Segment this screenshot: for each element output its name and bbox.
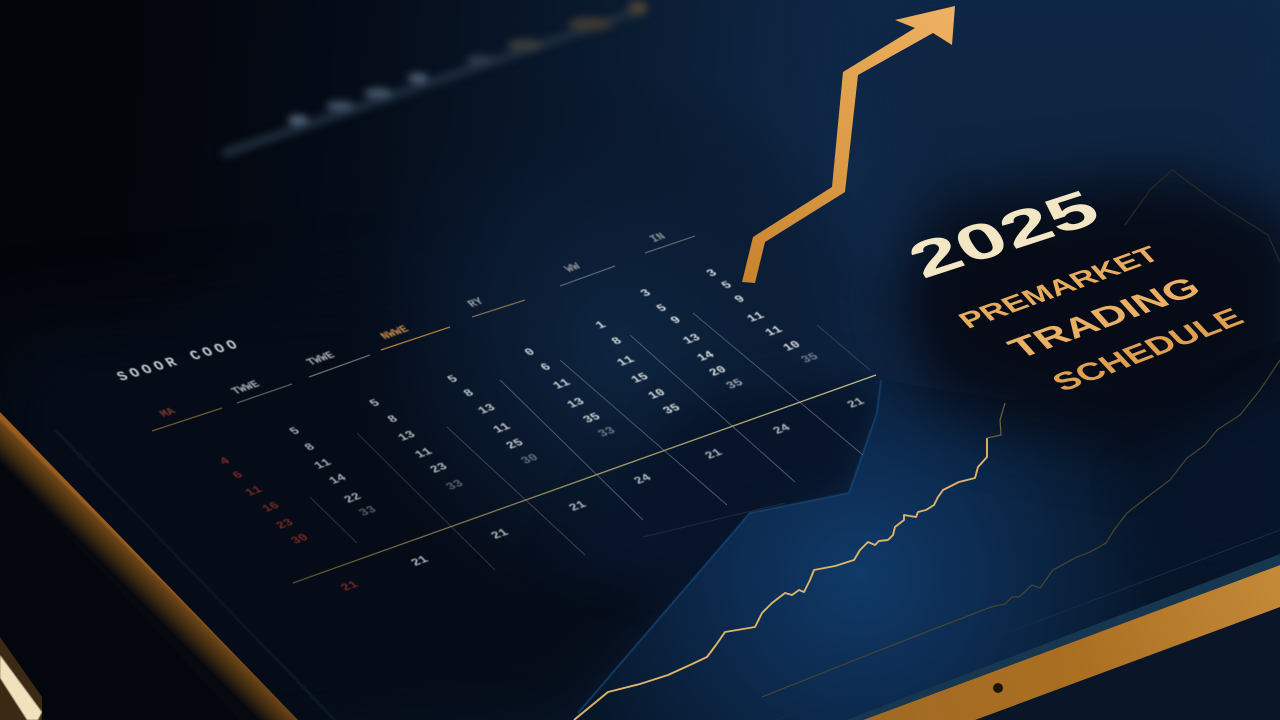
gold edge: left	[0, 412, 298, 720]
calendar column 3: 23	[427, 461, 451, 476]
calendar column 7: 20	[706, 364, 730, 379]
calendar column 8: 5	[719, 279, 735, 291]
calendar column: red dates: 6	[230, 469, 246, 481]
calendar weekday labels: MA	[157, 406, 179, 420]
calendar column 2: 33	[356, 504, 380, 519]
calendar column 4: 11	[490, 421, 514, 436]
calendar bottom row: 21	[408, 554, 432, 569]
calendar column 6: 15	[628, 371, 652, 386]
SCHEDULE: SCHEDULE	[1045, 303, 1250, 397]
dim upper contour line	[1125, 170, 1280, 262]
device button	[993, 683, 1003, 693]
calendar column 6: 35	[660, 402, 684, 417]
gold edge: right	[776, 530, 1280, 720]
calendar column 8: 10	[780, 339, 804, 354]
PREMARKET: PREMARKET	[953, 242, 1166, 334]
calendar weekday labels: IN	[647, 231, 669, 245]
calendar column 5: 6	[538, 361, 554, 373]
rising arrow	[742, 6, 955, 283]
calendar column: red dates: 30	[288, 532, 312, 547]
calendar column 7	[638, 287, 747, 392]
calendar gold axis line	[293, 375, 876, 583]
calendar column 3	[367, 397, 467, 493]
calendar column 4: 25	[503, 437, 527, 452]
calendar column 8: 11	[762, 324, 786, 339]
calendar column 7: 14	[694, 349, 718, 364]
calendar weekday labels: WW	[562, 261, 584, 275]
calendar column 4: 30	[518, 452, 542, 467]
calendar weekday labels	[157, 231, 669, 420]
calendar bottom row: 24	[631, 472, 655, 487]
gold chart line faint top	[987, 403, 1005, 438]
calendar right shade	[560, 375, 880, 590]
calendar column 2: 14	[326, 472, 350, 487]
calendar column: red dates	[217, 455, 312, 547]
calendar column 8: 9	[732, 293, 748, 305]
calendar column 5: 33	[595, 425, 619, 440]
calendar column 7: 35	[723, 377, 747, 392]
right side navy surface	[860, 0, 1280, 260]
calendar column 6	[593, 319, 684, 417]
calendar column 3: 8	[385, 413, 401, 425]
calendar column 4: 13	[475, 402, 499, 417]
calendar column 5	[522, 346, 619, 440]
blue chart outline	[578, 380, 881, 713]
calendar bottom row: 21	[844, 396, 868, 411]
calendar column 6: 8	[609, 335, 625, 347]
calendar column 5: 35	[580, 411, 604, 426]
calendar column 6: 10	[645, 387, 669, 402]
calendar weekday labels: TWWE	[304, 350, 338, 368]
calendar column 2: 5	[287, 425, 303, 437]
calendar column 8: 11	[744, 310, 768, 325]
calendar bottom row: 24	[770, 422, 794, 437]
calendar column 7: 5	[654, 302, 670, 314]
calendar column: red dates: 16	[259, 500, 283, 515]
calendar column 7: 9	[668, 314, 684, 326]
calendar column 7: 13	[680, 332, 704, 347]
year: 2025	[898, 180, 1110, 289]
calendar column: red dates: 11	[242, 484, 266, 499]
dark title patch	[890, 175, 1280, 450]
lower calendar shade	[0, 290, 850, 720]
dark right fade	[1130, 380, 1280, 590]
calendar bottom row: 21	[338, 579, 362, 594]
calendar column 2: 8	[302, 441, 318, 453]
calendar bottom row	[338, 396, 868, 594]
blue chart area	[574, 340, 1280, 720]
calendar column 8	[704, 267, 822, 366]
calendar column 4: 8	[461, 387, 477, 399]
calendar column 3: 11	[412, 446, 436, 461]
streak of blurred text at far edge	[220, 1, 648, 158]
calendar column 4	[445, 373, 542, 467]
calendar column 3: 13	[395, 429, 419, 444]
calendar column 2: 11	[311, 457, 335, 472]
calendar column 8: 35	[798, 351, 822, 366]
calendar bottom row: 21	[702, 447, 726, 462]
calendar grid lines	[310, 313, 870, 570]
calendar column: red dates: 4	[217, 455, 234, 468]
calendar column 6: 11	[614, 354, 638, 369]
pen at bottom left	[0, 637, 42, 720]
calendar column 5: 13	[564, 396, 588, 411]
calendar weekday labels: TWWE	[229, 379, 263, 397]
calendar bottom row: 21	[488, 527, 512, 542]
calendar column 5: 11	[550, 377, 574, 392]
calendar column 5: 0	[522, 346, 538, 358]
calendar column 3: 5	[367, 397, 383, 409]
calendar column 2: 22	[341, 491, 365, 506]
calendar weekday labels: NWWE	[378, 324, 412, 342]
gold chart line	[574, 438, 987, 720]
calendar column 8: 3	[704, 267, 720, 279]
calendar column 3: 33	[443, 478, 467, 493]
title block	[898, 180, 1250, 397]
calendar column 6: 1	[593, 319, 609, 331]
panel: tablet surface	[0, 65, 900, 720]
TRADING: TRADING	[1001, 271, 1208, 364]
calendar column 2	[287, 425, 380, 519]
calendar header underlines	[152, 236, 695, 431]
centre calendar glow	[340, 65, 900, 625]
calendar column 4: 5	[445, 373, 461, 385]
tablet inner edge: left	[55, 430, 335, 720]
calendar bottom row: 21	[566, 499, 590, 514]
calendar column 7: 3	[638, 287, 654, 299]
dim gold chart line	[762, 360, 1280, 697]
calendar column: red dates: 23	[273, 517, 297, 532]
calendar heading: SOOOR COOO	[114, 338, 242, 385]
calendar weekday labels: RY	[465, 296, 487, 310]
